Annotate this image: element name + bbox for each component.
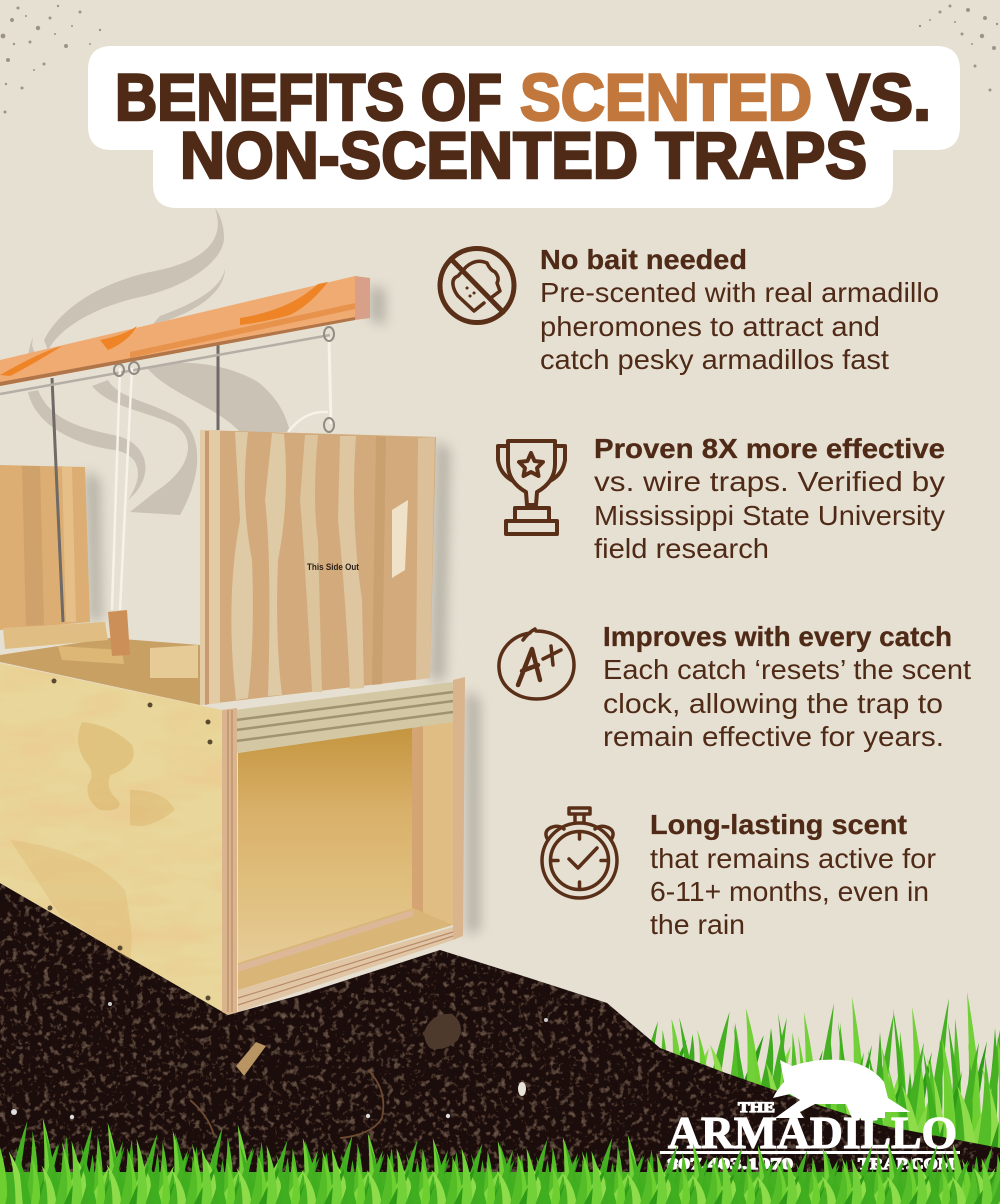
title line 1: VS. xyxy=(827,60,931,134)
benefit 3 text: Improves with every catch xyxy=(603,621,952,652)
benefit 1 text: No bait needed xyxy=(540,244,747,275)
benefit 2 text: vs. wire traps. Verified by xyxy=(594,466,945,497)
benefit 4 text: Long-lasting scent xyxy=(650,809,907,840)
benefit 2: proven xyxy=(498,433,945,564)
benefit 4 text: the rain xyxy=(650,909,745,940)
trap: top surface and blocks xyxy=(0,610,200,705)
logo: phone: 807.403.1070 xyxy=(667,1156,793,1173)
benefit 4 text: that remains active for xyxy=(650,843,936,874)
benefit 4 text: 6-11+ months, even in xyxy=(650,876,929,907)
benefit 3: improves xyxy=(499,621,971,752)
title line 1: BENEFITS OF xyxy=(115,60,502,134)
logo: ARMADILLO: ARMADILLO xyxy=(668,1107,957,1158)
benefit 1 text xyxy=(540,244,939,375)
logo: armadillo silhouette xyxy=(773,1060,910,1118)
benefit 3 text xyxy=(603,621,971,752)
benefit 4 text xyxy=(650,809,936,940)
benefit 1 text: pheromones to attract and xyxy=(540,311,880,342)
smoke: scent wisps xyxy=(28,208,290,515)
trap: inside right wall xyxy=(412,722,453,925)
benefit 1 text: catch pesky armadillos fast xyxy=(540,344,889,375)
trap: left door panel xyxy=(0,465,90,630)
benefit 1: no bait xyxy=(440,244,939,375)
title line 2: NON-SCENTED TRAPS xyxy=(180,118,867,192)
logo: The Armadillo Trap xyxy=(660,1060,960,1173)
trap: inside back wall xyxy=(238,727,413,965)
logo: website: TRAP.COM xyxy=(858,1156,955,1173)
benefit 2 text: field research xyxy=(594,533,769,564)
benefit 2 text: Mississippi State University xyxy=(594,500,945,531)
trap: front door panel xyxy=(200,430,436,705)
benefit 3 text: Each catch ‘resets’ the scent xyxy=(603,654,971,685)
grass behind soil, right side xyxy=(616,992,1000,1160)
door stamp text: This Side Out xyxy=(307,562,360,573)
title xyxy=(88,46,960,208)
wooden trap xyxy=(0,276,480,1015)
title backing box xyxy=(88,46,960,208)
benefit 1 text: Pre-scented with real armadillo xyxy=(540,277,939,308)
trap: floor xyxy=(238,908,453,990)
trap: rods and cords xyxy=(0,327,334,622)
title line 1: SCENTED xyxy=(520,60,812,134)
title line 1 xyxy=(115,60,931,134)
trap: top orange beam xyxy=(0,276,370,386)
icon: A+ grade xyxy=(499,629,574,699)
soil mound xyxy=(0,883,1000,1204)
logo: THE: THE xyxy=(738,1100,775,1116)
icon: trophy xyxy=(498,441,565,534)
trap: door shadows on wall xyxy=(85,285,480,935)
benefit 4: long-lasting xyxy=(542,808,936,940)
benefit 2 text xyxy=(594,433,945,564)
trap: front frame xyxy=(222,677,465,1015)
foreground grass xyxy=(0,1117,1000,1204)
icon: no bread xyxy=(440,248,514,322)
trap: side face xyxy=(0,663,228,1015)
logo: rule xyxy=(660,1151,960,1154)
icon: stopwatch xyxy=(542,808,617,898)
benefit 3 text: remain effective for years. xyxy=(603,721,944,752)
decorative speckles top corners xyxy=(1,4,998,114)
soil details: clod, wood chip, root, specks xyxy=(11,1002,548,1138)
benefit 3 text: clock, allowing the trap to xyxy=(603,688,943,719)
benefit 2 text: Proven 8X more effective xyxy=(594,433,945,464)
